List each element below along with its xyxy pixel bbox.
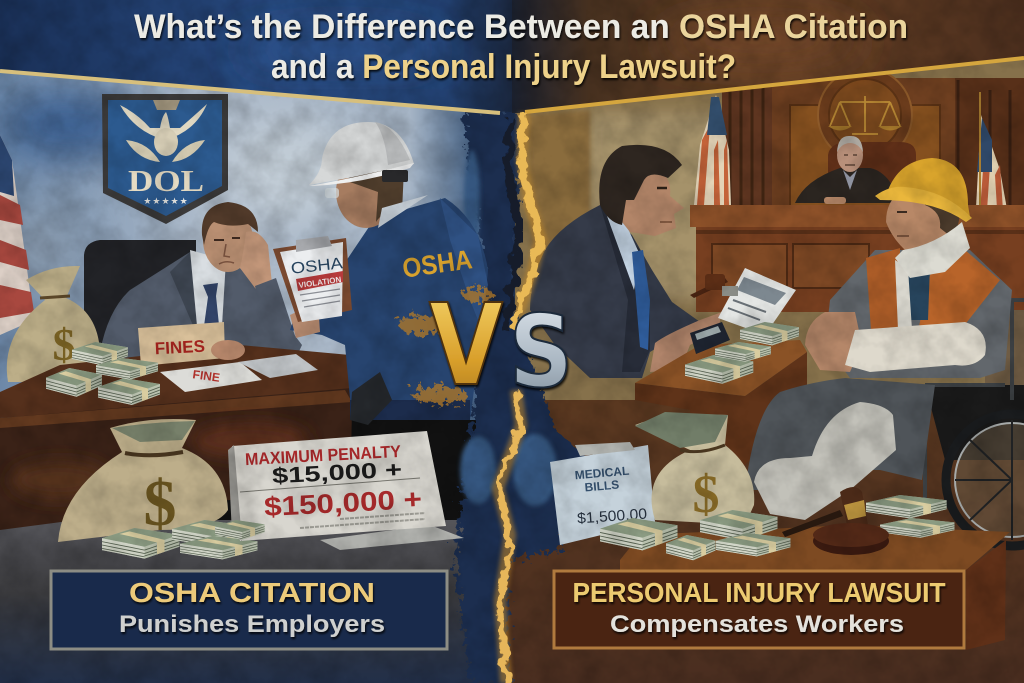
inspector figure	[290, 156, 488, 425]
desk reddish mottling	[10, 422, 310, 500]
header texture highlights	[240, 20, 860, 66]
worker legs	[745, 378, 935, 490]
wheelchair	[925, 300, 1024, 546]
gold-brown wall strip right of crack	[528, 110, 590, 320]
yellow hard hat	[875, 158, 972, 222]
calculator	[690, 322, 730, 354]
title line one: What’s the Difference Between an OSHA Citation	[134, 8, 908, 46]
fines folder: FINES	[154, 337, 205, 358]
penalty amount one: $15,000 +	[271, 457, 403, 488]
DOL shield	[102, 94, 228, 224]
table right side	[966, 540, 1006, 650]
flag: courtroom right	[975, 92, 1010, 228]
document held by lawyer	[718, 268, 796, 335]
inspector jacket OSHA text: OSHA	[401, 244, 474, 284]
big money bag: $	[144, 467, 176, 540]
central gold crack: upper	[514, 113, 541, 330]
right wall lighter plaster	[585, 112, 725, 300]
money bag: small left: $	[52, 319, 76, 370]
emblem: scales of justice	[818, 68, 912, 162]
lawyer figure	[530, 145, 722, 378]
cash stacks on left desk	[46, 342, 160, 405]
title line two: and a Personal Injury Lawsuit?	[271, 48, 736, 86]
maximum penalty notice	[228, 431, 446, 541]
fine document: FINE	[192, 367, 221, 385]
eagle emblem	[120, 100, 207, 162]
label: OSHA citation	[51, 571, 447, 649]
cash stacks on right table	[600, 495, 954, 560]
manager hand	[211, 340, 245, 360]
header band: right	[512, 0, 1024, 113]
central gold crack glow	[498, 113, 541, 683]
header band: left	[0, 0, 522, 113]
medical bills	[550, 442, 655, 545]
leg cast	[754, 402, 896, 520]
title	[134, 8, 908, 86]
white hard hat	[309, 122, 414, 186]
big money bag	[58, 419, 228, 542]
money bag: small left	[7, 266, 100, 382]
shield text DOL: DOL	[128, 163, 204, 198]
left desk front	[0, 388, 352, 530]
gold sparks near VS	[399, 288, 494, 404]
flag: courtroom left	[694, 95, 731, 205]
cash stack by notice	[215, 520, 265, 540]
label heading: OSHA CITATION	[129, 577, 375, 608]
label: personal injury lawsuit	[554, 571, 964, 648]
gold rule: right	[525, 58, 1024, 112]
background: right floor	[505, 400, 1024, 683]
penalty heading: MAXIMUM PENALTY	[245, 442, 402, 469]
VS emblem	[429, 281, 573, 411]
fine document	[160, 362, 262, 392]
fines folder	[138, 322, 225, 366]
gold rule: left	[0, 71, 500, 113]
money bag: right	[635, 412, 754, 525]
flag: left scene	[0, 135, 34, 335]
dark blue texture around centre	[455, 110, 590, 683]
dark crack core	[505, 118, 520, 330]
penalty amount two: $150,000 +	[263, 484, 423, 522]
label heading: PERSONAL INJURY LAWSUIT	[572, 577, 946, 608]
tan floor behind wheelchair	[985, 310, 1024, 400]
navy mottled speckles	[460, 150, 557, 506]
shield stars: ★★★★★	[143, 197, 189, 207]
medical bills amount: $1,500,00	[577, 506, 648, 527]
manager figure	[100, 202, 302, 365]
judge's bench	[690, 205, 1024, 312]
background: right wall	[515, 60, 1024, 400]
medical bills heading: MEDICAL	[574, 464, 630, 482]
desk chair	[84, 240, 196, 345]
central gold crack: lower	[498, 390, 521, 683]
gavel	[782, 487, 889, 555]
label subheading: Punishes Employers	[119, 611, 385, 638]
background: left floor	[0, 520, 505, 683]
cash on lawyer's desk	[685, 322, 799, 384]
worker head	[886, 190, 962, 250]
medical bills subheading: BILLS	[584, 478, 620, 494]
money bag: right: $	[692, 464, 720, 524]
wall mottling left	[0, 90, 360, 300]
cash stacks on floor	[102, 520, 258, 559]
worker torso	[805, 248, 1012, 378]
background: left wall	[0, 60, 525, 420]
letter V: V	[429, 281, 503, 411]
neck brace	[895, 222, 970, 278]
clipboard OSHA logo: OSHA	[290, 255, 344, 278]
lower right table top	[620, 525, 1010, 570]
clipboard	[273, 236, 352, 322]
lawyer's desk top	[635, 340, 807, 396]
clipboard violation band: VIOLATION	[298, 275, 342, 290]
paper on desk	[238, 354, 318, 378]
left desk top	[0, 345, 352, 418]
letter S: S	[509, 293, 573, 410]
courtroom wood panelling	[722, 78, 1024, 308]
left desk edge highlight	[0, 390, 352, 428]
paper under penalty sign	[320, 525, 464, 550]
lawyer's desk sides	[635, 352, 807, 465]
label subheading: Compensates Workers	[610, 611, 904, 638]
judge	[795, 136, 916, 204]
small gavel on bench	[690, 274, 738, 298]
